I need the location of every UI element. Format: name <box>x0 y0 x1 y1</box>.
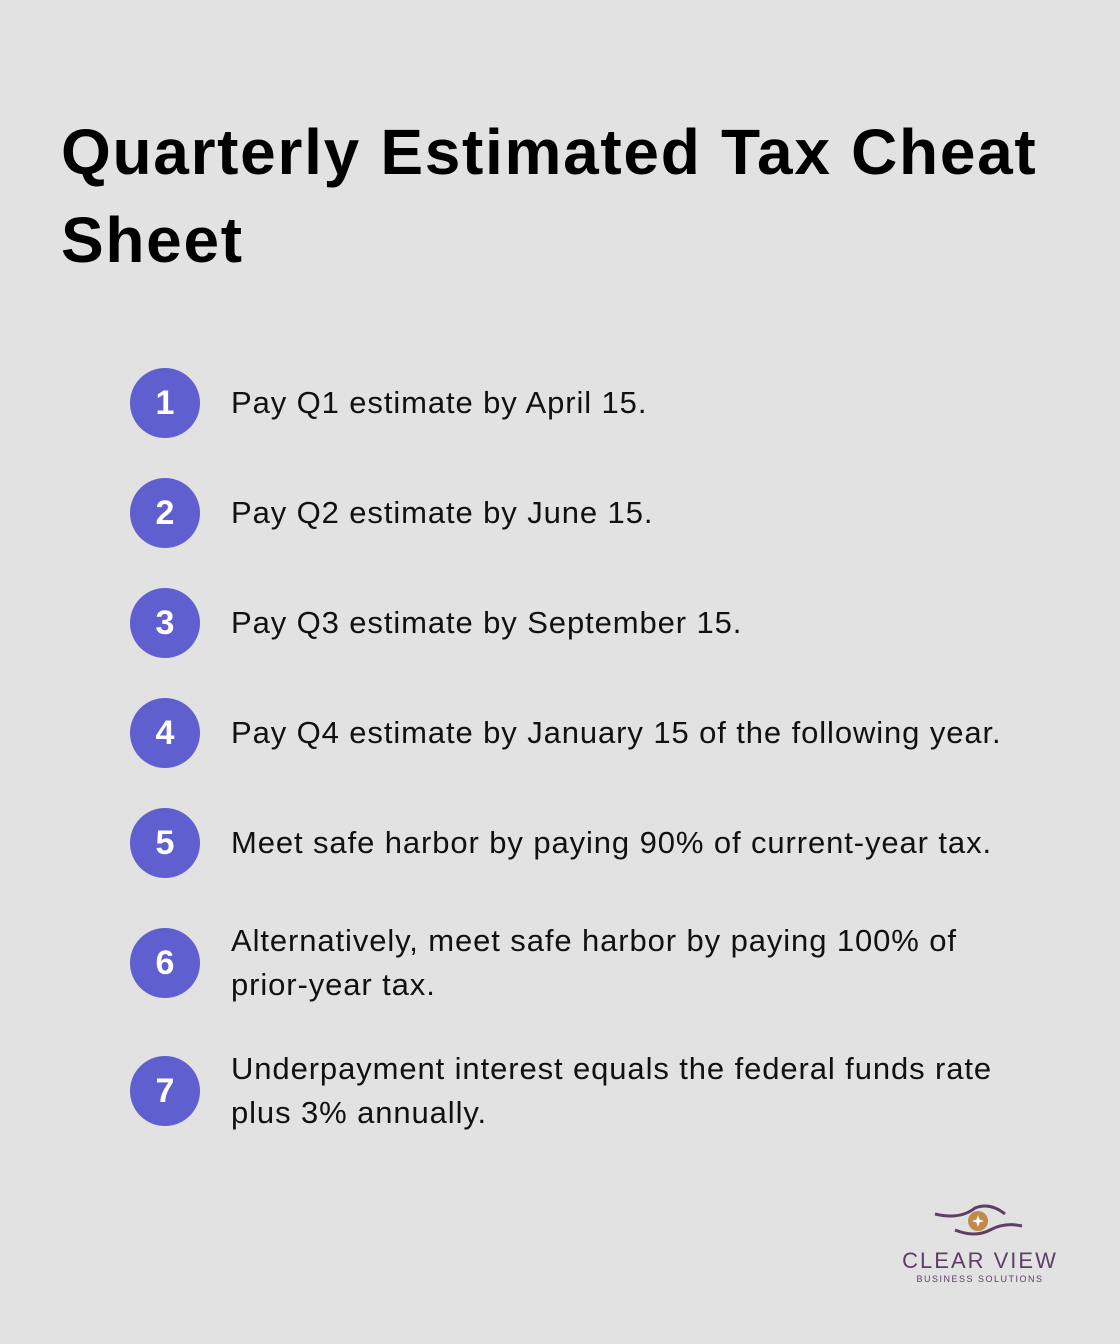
text 4: Pay Q4 estimate by January 15 of the following year. <box>231 715 1002 750</box>
logo text: CLEAR VIEW <box>902 1248 1058 1273</box>
badge 5 <box>130 808 200 878</box>
text 7: Underpayment interest equals the federal funds rate plus 3% annually. <box>231 1051 992 1130</box>
badge 7: 7 <box>156 1072 174 1110</box>
badge 6 <box>130 928 200 998</box>
text 6: Alternatively, meet safe harbor by paying 100% of prior-year tax. <box>231 923 957 1002</box>
badge 1 <box>130 368 200 438</box>
text 3: Pay Q3 estimate by September 15. <box>231 605 742 640</box>
item 7 <box>130 1051 992 1130</box>
logo icon <box>934 1204 1022 1236</box>
badge 7 <box>130 1056 200 1126</box>
item 1 <box>130 368 647 438</box>
logo: BUSINESS SOLUTIONS <box>916 1274 1044 1284</box>
item 3 <box>130 588 742 658</box>
badge 5: 5 <box>156 824 174 862</box>
badge 2: 2 <box>156 494 174 532</box>
badge 1: 1 <box>156 384 174 422</box>
item 2 <box>130 478 653 548</box>
badge 2 <box>130 478 200 548</box>
text 1: Pay Q1 estimate by April 15. <box>231 385 647 420</box>
badge 3 <box>130 588 200 658</box>
item 5 <box>130 808 992 878</box>
title: Quarterly Estimated Tax Cheat Sheet <box>61 116 1037 276</box>
badge 4 <box>130 698 200 768</box>
item 6 <box>130 923 957 1002</box>
text 2: Pay Q2 estimate by June 15. <box>231 495 653 530</box>
text 5: Meet safe harbor by paying 90% of current-year tax. <box>231 825 992 860</box>
item 4 <box>130 698 1002 768</box>
badge 4: 4 <box>156 714 174 752</box>
logo <box>902 1204 1058 1284</box>
badge 6: 6 <box>156 944 174 982</box>
badge 3: 3 <box>156 604 174 642</box>
